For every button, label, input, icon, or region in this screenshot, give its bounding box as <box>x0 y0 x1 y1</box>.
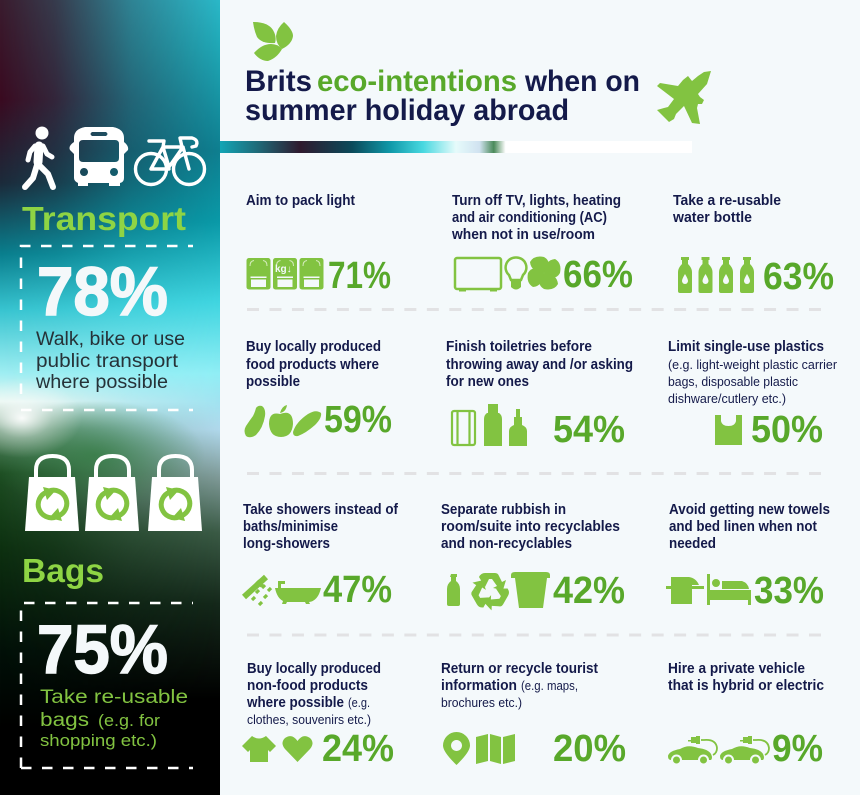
heading: room/suite into recyclables <box>441 519 620 535</box>
heading: (e.g. light-weight plastic carrier <box>668 357 838 372</box>
heading <box>669 502 830 552</box>
percent: 24% <box>322 728 394 770</box>
title: summer holiday abroad <box>245 94 569 127</box>
percent: 66% <box>563 254 633 296</box>
heading: clothes, souvenirs etc.) <box>247 712 371 727</box>
decorative gradient band <box>220 141 692 153</box>
item: turn off appliances <box>451 193 633 296</box>
heading: for new ones <box>446 374 529 390</box>
text: transport description: Walk, bike or use <box>36 329 185 350</box>
item: water bottle <box>672 193 834 298</box>
percent: 47% <box>323 569 392 611</box>
title: eco-intentions <box>317 65 517 98</box>
heading <box>243 502 398 552</box>
heading: Bags: Bags <box>22 552 104 589</box>
icon: pin and map <box>443 732 515 765</box>
heading: long-showers <box>243 536 330 552</box>
heading: Finish toiletries before <box>446 339 592 355</box>
heading: and bed linen when not <box>669 519 817 535</box>
heading: (e.g. maps, <box>521 678 578 693</box>
percent: 54% <box>553 409 625 451</box>
icon: bicycle <box>136 138 204 184</box>
icon: cucumber, apple, bread <box>244 405 321 437</box>
text: transport description: where possible <box>35 372 168 393</box>
icon: bus <box>70 127 128 186</box>
heading <box>246 661 381 727</box>
heading <box>441 502 620 552</box>
icon: towel and bottles <box>452 404 527 446</box>
item: recycling <box>441 502 625 614</box>
title <box>245 65 640 127</box>
heading: Separate rubbish in <box>441 502 566 518</box>
heading: Return or recycle tourist <box>441 661 598 677</box>
stat: 75%: 75% <box>37 611 168 688</box>
heading: Aim to pack light <box>246 193 355 209</box>
icon: towel and bed <box>666 574 751 605</box>
panel: left gradient sidebar <box>0 0 220 795</box>
icon: carrier bag <box>715 415 742 445</box>
item: toiletries <box>446 339 633 451</box>
icon: electric cars <box>668 736 769 764</box>
icon: suitcases: kg↓ <box>275 264 292 275</box>
item: towels and linen <box>666 502 830 612</box>
icon: reusable bags <box>25 456 202 531</box>
icon: bottles <box>678 257 754 293</box>
icon: tv, bulb, fan <box>455 257 560 292</box>
heading: that is hybrid or electric <box>668 678 824 694</box>
percent: 9% <box>772 728 823 770</box>
heading: bags, disposable plastic <box>668 374 798 389</box>
title: when on <box>524 65 640 98</box>
item: showers <box>243 502 398 611</box>
item: local food <box>244 339 392 441</box>
text: transport description <box>35 329 185 393</box>
dashed row dividers <box>247 310 821 635</box>
heading: Take showers instead of <box>243 502 398 518</box>
heading: Transport: Transport <box>22 200 186 237</box>
heading: baths/minimise <box>243 519 338 535</box>
text: bags description: (e.g. for <box>98 711 160 730</box>
text: bags description: Take re-usable <box>40 687 188 708</box>
heading: possible <box>246 374 300 390</box>
heading: throwing away and /or asking <box>446 357 633 373</box>
heading: water bottle <box>672 210 752 226</box>
text: bags description: bags <box>40 710 89 731</box>
heading: brochures etc.) <box>441 695 522 710</box>
heading <box>668 661 824 694</box>
item: electric vehicle <box>668 661 824 770</box>
heading: (e.g. <box>348 695 370 710</box>
heading: Buy locally produced <box>247 661 381 677</box>
text: transport description: public transport <box>36 351 179 372</box>
item: tourist information <box>441 661 626 770</box>
item: single-use plastics <box>668 339 838 451</box>
icon: airplane <box>657 71 711 124</box>
heading: and air conditioning (AC) <box>452 210 607 226</box>
icon: leaves <box>253 22 293 61</box>
heading: Take a re-usable <box>673 193 781 209</box>
text: bags description: shopping etc.) <box>40 731 157 750</box>
heading: and non-recyclables <box>441 536 572 552</box>
stat: 78%: 78% <box>37 253 168 330</box>
heading: non-food products <box>247 678 368 694</box>
heading: dishware/cutlery etc.) <box>668 391 786 406</box>
icon: bottle, recycle symbol, bin <box>447 572 550 614</box>
percent: 50% <box>751 409 823 451</box>
percent: 42% <box>553 570 625 612</box>
heading: when not in use/room <box>451 227 595 243</box>
percent: 33% <box>754 570 824 612</box>
icon: walking person <box>25 126 53 187</box>
title: Brits <box>245 65 312 98</box>
heading <box>668 339 838 406</box>
heading <box>451 193 621 243</box>
heading <box>672 193 781 226</box>
heading: information <box>441 678 517 694</box>
heading: Hire a private vehicle <box>668 661 805 677</box>
heading <box>441 661 598 710</box>
item: pack light <box>246 193 391 297</box>
heading <box>446 339 633 390</box>
heading: Limit single-use plastics <box>668 339 824 355</box>
percent: 71% <box>328 255 391 297</box>
item: local non-food <box>242 661 394 770</box>
heading: food products where <box>246 357 379 373</box>
percent: 20% <box>553 728 626 770</box>
icon: t-shirt and heart <box>242 736 312 762</box>
icon: shower and bath <box>244 577 321 605</box>
heading: Turn off TV, lights, heating <box>452 193 621 209</box>
heading: Buy locally produced <box>246 339 381 355</box>
icon: suitcases <box>246 258 324 290</box>
panel: transport stat box <box>21 246 193 410</box>
percent: 59% <box>324 399 392 441</box>
heading: Avoid getting new towels <box>669 502 830 518</box>
text: bags description <box>40 687 188 750</box>
panel: bags stat box <box>21 603 193 768</box>
heading <box>246 339 381 390</box>
percent: 63% <box>763 256 834 298</box>
heading: where possible <box>246 695 344 711</box>
heading: needed <box>669 536 716 552</box>
